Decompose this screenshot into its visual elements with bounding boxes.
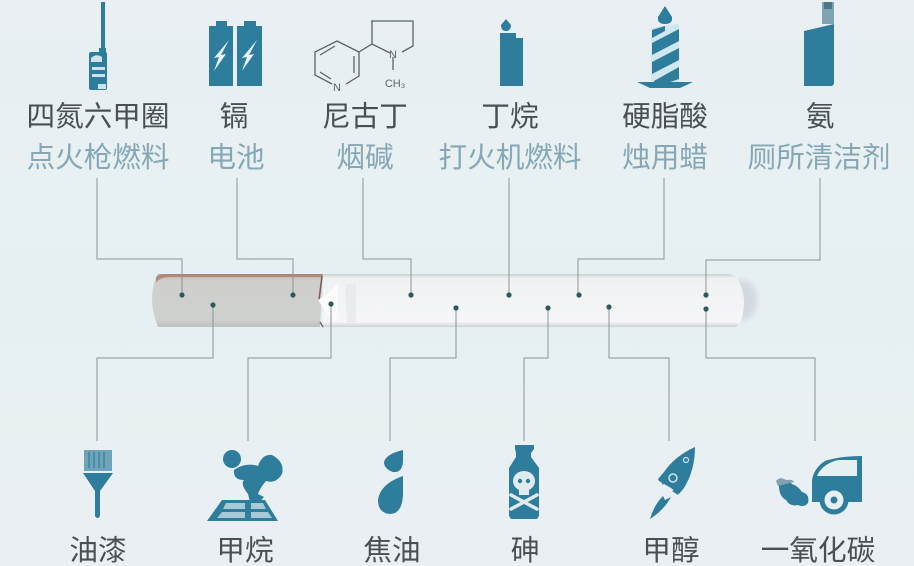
- marker dots: [179, 292, 709, 312]
- icon: paint brush: [83, 450, 113, 518]
- label: 厕所清洁剂: 厕所清洁剂: [748, 142, 890, 174]
- top labels: [27, 101, 890, 174]
- icon: batteries: [209, 21, 262, 86]
- icon: car exhaust: [776, 456, 862, 514]
- icon: nicotine molecule: N: [333, 82, 341, 94]
- connector lines: top: [97, 178, 820, 295]
- label: 丁烷: 丁烷: [481, 101, 539, 133]
- icon: nicotine molecule: CH₃: [385, 78, 405, 90]
- label: 烟碱: 烟碱: [336, 142, 394, 174]
- connector lines: bottom: [97, 304, 815, 441]
- icon: lighter: [500, 19, 523, 86]
- icon: tar drops: [378, 450, 403, 514]
- label: 硬脂酸: 硬脂酸: [622, 101, 708, 133]
- label: 氨: 氨: [806, 101, 834, 133]
- icon: poison bottle: [509, 445, 539, 519]
- icon: walkie-talkie: [89, 2, 107, 90]
- cigarette: [152, 274, 757, 327]
- label: 尼古丁: 尼古丁: [322, 101, 408, 133]
- icon: methane gas over a book: [207, 450, 283, 521]
- icon: cleaner bottle: [804, 2, 834, 86]
- label: 点火枪燃料: 点火枪燃料: [27, 142, 169, 174]
- icon: rocket: [650, 447, 695, 519]
- label: 镉: 镉: [220, 101, 248, 133]
- label: 电池: 电池: [207, 142, 265, 174]
- bottom labels: [69, 535, 875, 566]
- label: 烛用蜡: 烛用蜡: [622, 142, 708, 174]
- icon: nicotine molecule: [315, 21, 413, 94]
- icon: nicotine molecule: N: [389, 49, 397, 61]
- icon: candle: [637, 6, 693, 88]
- label: 四氮六甲圈: 四氮六甲圈: [27, 101, 169, 133]
- label: 打火机燃料: 打火机燃料: [439, 142, 581, 174]
